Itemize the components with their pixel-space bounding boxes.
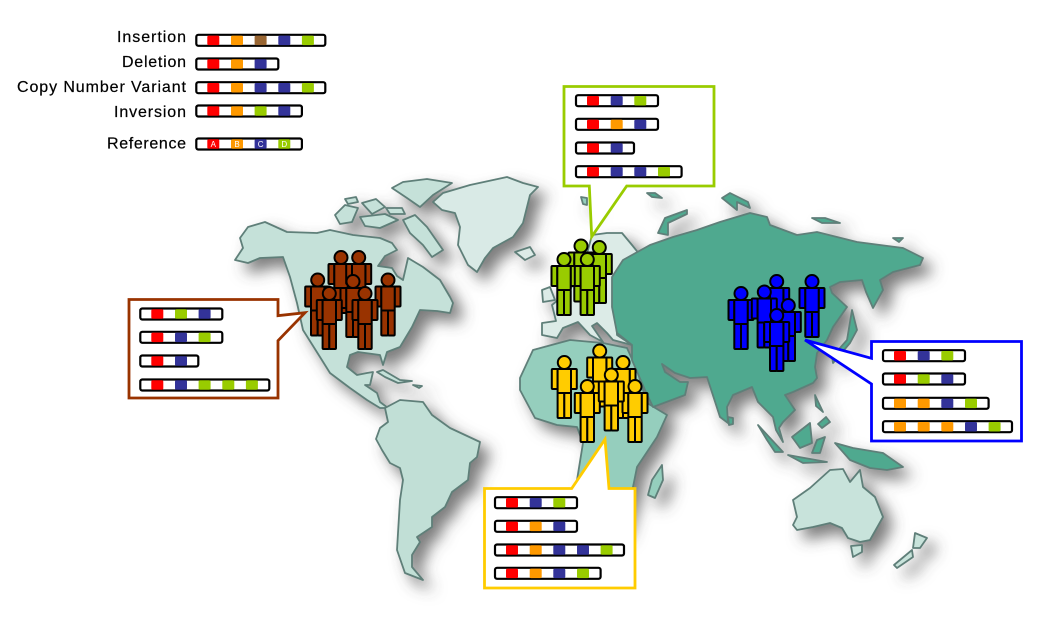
legend: reference bbox=[107, 136, 302, 152]
legend: deletion bbox=[122, 54, 278, 71]
asian islands bbox=[647, 193, 903, 470]
callout: africa bbox=[484, 439, 635, 588]
greenland bbox=[433, 177, 538, 272]
africa bbox=[520, 340, 667, 540]
callout: europe bbox=[564, 86, 714, 237]
north america bbox=[235, 222, 453, 408]
svalbard bbox=[581, 197, 587, 205]
callout: north america bbox=[129, 300, 305, 398]
tasmania and new zealand bbox=[851, 533, 927, 568]
people group: europe bbox=[552, 240, 612, 315]
legend: inversion: Inversion bbox=[114, 104, 186, 121]
madagascar bbox=[648, 465, 663, 498]
legend: copy number variant: Copy Number Variant bbox=[17, 79, 187, 96]
legend: insertion bbox=[117, 29, 325, 46]
arctic islands bbox=[335, 179, 452, 257]
legend bbox=[17, 29, 325, 152]
asia bbox=[612, 213, 923, 442]
legend: reference: B bbox=[234, 140, 240, 149]
callout: asia bbox=[805, 340, 1022, 441]
people group: asia bbox=[728, 275, 824, 371]
people group: north america bbox=[305, 251, 400, 349]
people group: africa bbox=[552, 344, 648, 442]
world map bbox=[235, 177, 927, 580]
south america bbox=[376, 400, 480, 580]
australia bbox=[793, 469, 883, 542]
legend: reference: A bbox=[211, 140, 217, 149]
legend: inversion bbox=[114, 104, 302, 121]
europe bbox=[542, 233, 640, 345]
legend: reference: Reference bbox=[107, 136, 186, 152]
legend: insertion: Insertion bbox=[117, 29, 186, 46]
legend: copy number variant bbox=[17, 79, 325, 96]
legend: reference: D bbox=[281, 140, 287, 149]
caribbean islands bbox=[377, 370, 422, 388]
legend: reference: C bbox=[258, 140, 264, 149]
iceland and britain bbox=[515, 247, 555, 302]
legend: deletion: Deletion bbox=[122, 54, 186, 71]
